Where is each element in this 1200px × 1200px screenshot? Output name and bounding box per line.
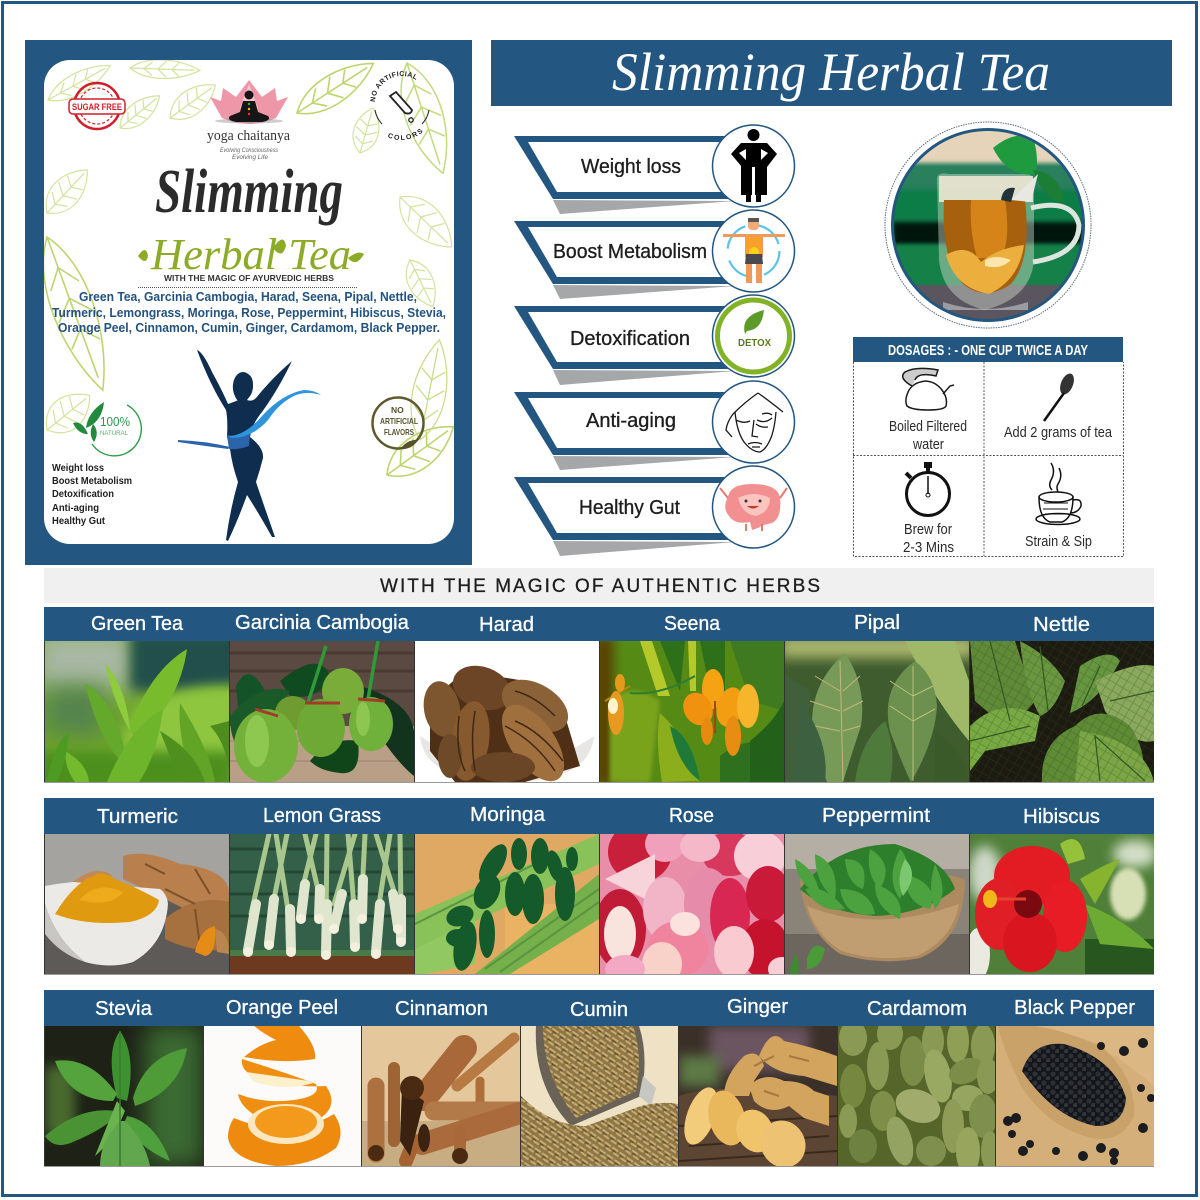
title banner [491,40,1172,106]
herb row 1 [35,607,1154,792]
label: herb names row 1: Pipal [854,612,900,634]
text: boiled filtered water: Boiled Filtered [889,418,967,435]
photo: rose [600,834,784,974]
label: herb names row 3: Ginger [727,996,788,1018]
subtitle: Herbal Tea: Herbal Tea [150,230,351,279]
icon: kettle [903,368,954,410]
text: boiled filtered water: water [912,436,944,453]
label: herb names row 3 [95,996,1135,1021]
icon: smiling intestine [712,466,794,548]
photo: nettle [970,641,1154,782]
icon: detox leaf ring [712,295,794,377]
icon: sugar free stamp [69,83,125,129]
label: herb names row 1: Green Tea [91,613,184,635]
title: Slimming: Slimming [155,158,343,226]
badge: no artificial flavors: FLAVORS [384,427,414,437]
label: herb names row 2 [97,804,1100,828]
label: herb names row 2: Rose [669,805,714,827]
tagline: WITH THE MAGIC OF AYURVEDIC HERBS [164,273,334,283]
label: herb names row 3: Orange Peel [226,997,338,1019]
photo: stevia [45,1026,203,1166]
text: boiled filtered water [889,418,967,453]
icon: slimmer silhouette [712,125,794,207]
benefit: weight loss: Weight loss [581,156,681,178]
photo: cumin [521,1026,678,1166]
benefit: boost metabolism [514,210,794,299]
photo: orange peel [204,1026,361,1166]
photo: pipal [785,641,969,782]
icon: coffee cup [1036,463,1081,524]
label: herb names row 1: Harad [479,614,534,636]
benefit: boost metabolism: Boost Metabolism [553,241,707,263]
icon: sugar free stamp: SUGAR FREE [72,102,122,113]
title banner: Slimming Herbal Tea [612,42,1050,102]
benefit: anti-aging [514,381,794,470]
label: herb names row 2: Hibiscus [1023,806,1100,828]
icon: aging face [712,381,794,463]
photo: lemon grass [230,834,414,974]
text: brew: 2-3 Mins [903,539,954,556]
icon: spoon [1044,372,1077,421]
label: herb names row 1: Garcinia Cambogia [235,612,410,634]
photo: moringa [415,834,599,974]
herb row 2 [44,798,1157,986]
label: herb names row 1: Seena [664,613,721,635]
text: brew [903,521,954,556]
badge: no artificial flavors: NO [391,405,404,415]
section heading: WITH THE MAGIC OF AUTHENTIC HERBS [380,576,820,597]
herb row 3 [44,990,1155,1176]
benefit: detoxification [514,295,794,385]
badge: no artificial flavors: ARTIFICIAL [380,416,418,426]
ingredients list: Turmeric, Lemongrass, Moringa, Rose, Peppermint, Hibiscus, Stevia, [52,305,446,320]
badge: no artificial flavors [372,398,424,449]
panel: product package [25,40,472,565]
benefits list [52,463,132,527]
text: brew: Brew for [904,521,952,538]
label: herb names row 3: Cardamom [867,998,967,1020]
badge: no artificial colors: NO ARTIFICIAL [370,71,416,102]
section heading [44,568,1154,603]
benefits list: Anti-aging [52,503,99,514]
icon: metabolism figure [712,210,794,292]
panel: dosages: DOSAGES : - ONE CUP TWICE A DAY [888,342,1088,359]
logo: yoga chaitanya: Evolving Consciousness [220,148,278,154]
logo: yoga chaitanya: Evolving Life [232,155,269,161]
badge: 100% natural: NATURAL [100,430,128,437]
figure: slim dancer [178,350,321,541]
logo: yoga chaitanya: yoga chaitanya [207,128,291,144]
label: herb names row 3: Cumin [570,999,628,1021]
label: herb names row 1 [91,612,1090,636]
benefits list: Weight loss [52,463,104,474]
badge: no artificial colors: COLORS [388,128,422,140]
benefit: healthy gut: Healthy Gut [579,497,680,519]
label: herb names row 3: Stevia [95,998,153,1020]
photo: seena [600,641,784,782]
photo: tea cup in circle [885,122,1091,328]
photo: green tea [45,641,229,782]
badge: 100% natural: 100% [100,414,130,429]
background leaf outlines [44,60,454,478]
label: herb names row 2: Moringa [470,804,546,826]
label: herb names row 2: Peppermint [822,805,930,827]
benefits list: Boost Metabolism [52,476,132,487]
label: herb names row 1: Nettle [1033,614,1090,636]
photo: cinnamon [362,1026,520,1166]
text: strain and sip: Strain & Sip [1025,533,1092,550]
photo: peppermint [785,834,969,974]
label: herb names row 2: Turmeric [97,806,178,828]
panel: dosages [853,337,1124,556]
benefit: weight loss [514,125,794,214]
icon: detox leaf ring: DETOX [738,338,771,349]
benefit: healthy gut [514,466,794,556]
photo: hibiscus [970,834,1154,974]
photo: cardamom [838,1026,995,1166]
photo: garcinia cambogia [230,641,414,782]
photo: black pepper [996,1026,1154,1166]
label: herb names row 3: Black Pepper [1014,997,1135,1019]
logo: yoga chaitanya [207,80,291,161]
label: herb names row 2: Lemon Grass [263,805,381,827]
benefits list: Healthy Gut [52,516,106,527]
label: herb names row 3: Cinnamon [395,998,488,1020]
photo: ginger [679,1026,837,1166]
icon: stopwatch [906,462,950,516]
photo: turmeric [45,834,229,974]
benefit: anti-aging: Anti-aging [586,410,676,432]
badge: no artificial colors [370,71,430,140]
photo: harad [415,641,599,782]
ingredients list: Orange Peel, Cinnamon, Cumin, Ginger, Cardamom, Black Pepper. [58,320,440,335]
badge: 100% natural [73,402,141,456]
ingredients list: Green Tea, Garcinia Cambogia, Harad, Seena, Pipal, Nettle, [79,289,417,304]
benefit: detoxification: Detoxification [570,328,690,350]
text: add tea: Add 2 grams of tea [1004,424,1113,441]
ingredients list [52,289,446,335]
benefits list: Detoxification [52,489,114,500]
